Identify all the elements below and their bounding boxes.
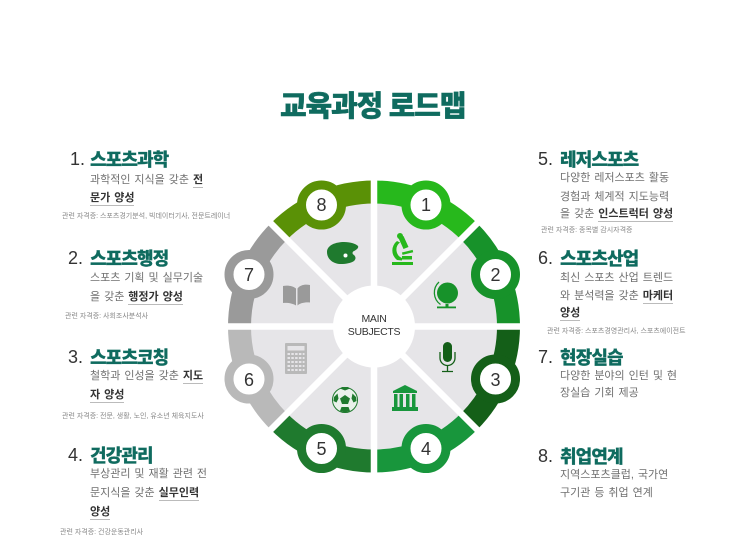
item 1: 스포츠과학: 스포츠과학	[90, 150, 168, 170]
center circle	[333, 286, 415, 368]
item 6: 스포츠산업	[538, 248, 686, 335]
icon: globe	[434, 282, 458, 308]
center label	[348, 313, 401, 338]
item 7: 현장실습: 현장실습	[560, 348, 623, 368]
badge numbers: 7	[244, 265, 254, 285]
icon: palette	[327, 242, 358, 264]
icon: microphone	[440, 342, 455, 372]
icon: calculator	[285, 343, 307, 374]
item 3: 스포츠코칭	[62, 347, 204, 420]
item 4: 건강관리: 건강관리	[90, 446, 153, 466]
item 5: 레저스포츠: 을 갖춘 인스트럭터 양성	[560, 208, 673, 220]
icon: temple	[392, 385, 418, 411]
item 1: 스포츠과학	[62, 149, 230, 220]
badge numbers: 6	[244, 370, 254, 390]
item 7: 현장실습: 다양한 분야의 인턴 및 현	[560, 370, 677, 382]
item 3: 스포츠코칭: 관련 자격증: 전문, 생활, 노인, 유소년 체육지도사	[62, 413, 204, 420]
item 6: 스포츠산업: 양성	[560, 307, 580, 319]
item 8: 취업연계	[538, 446, 668, 499]
center label: SUBJECTS	[348, 326, 401, 338]
segment 3	[469, 326, 516, 422]
badge numbers: 8	[316, 195, 327, 215]
center label: MAIN	[361, 313, 387, 325]
item 4: 건강관리: 문지식을 갖춘 실무인력	[90, 487, 199, 499]
item 6: 스포츠산업: 관련 자격증: 스포츠경영관리사, 스포츠에이전트	[547, 328, 686, 335]
item 4: 건강관리: 양성	[90, 506, 110, 518]
item 1: 스포츠과학: 문가 양성	[90, 192, 134, 204]
icon: book	[283, 285, 310, 306]
item 4: 건강관리: 4.	[68, 445, 83, 465]
item 5: 레저스포츠: 다양한 레저스포츠 활동	[560, 172, 669, 184]
item 6: 스포츠산업: 6.	[538, 248, 553, 268]
item 3: 스포츠코칭: 스포츠코칭	[90, 348, 168, 368]
segment 8	[279, 185, 374, 231]
wheel inner disc	[249, 202, 499, 452]
item 2: 스포츠행정: 을 갖춘 행정가 양성	[90, 291, 183, 303]
badge numbers: 3	[490, 370, 501, 390]
item 6: 스포츠산업: 최신 스포츠 산업 트렌드	[560, 272, 673, 284]
item 2: 스포츠행정: 2.	[68, 248, 83, 268]
item 8: 취업연계: 8.	[538, 446, 553, 466]
badge numbers: 5	[316, 439, 327, 459]
item 5: 레저스포츠: 경험과 체계적 지도능력	[560, 191, 669, 203]
separators	[218, 170, 530, 483]
segment 5	[279, 422, 374, 468]
segment 1	[374, 185, 469, 231]
item 6: 스포츠산업: 와 분석력을 갖춘 마케터	[560, 290, 673, 302]
item 5: 레저스포츠: 관련 자격증: 종목별 감시자격증	[541, 227, 632, 234]
item 4: 건강관리	[60, 445, 207, 536]
item 7: 현장실습: 7.	[538, 347, 553, 367]
item 2: 스포츠행정	[65, 248, 203, 320]
item 3: 스포츠코칭: 자 양성	[90, 389, 124, 401]
icon: soccer ball	[332, 387, 358, 412]
item 5: 레저스포츠	[538, 149, 673, 234]
segment 2	[469, 231, 516, 326]
item 6: 스포츠산업: 스포츠산업	[560, 249, 638, 269]
badge numbers	[244, 195, 501, 459]
item 4: 건강관리: 부상관리 및 재활 관련 전	[90, 468, 207, 480]
item 1: 스포츠과학: 관련 자격증: 스포츠경기분석, 빅데이터기사, 전문트레이너	[62, 213, 230, 220]
item 5: 레저스포츠: 5.	[538, 149, 553, 169]
badge numbers: 1	[421, 195, 431, 215]
item 2: 스포츠행정: 관련 자격증: 사회조사분석사	[65, 313, 148, 320]
segment 7	[229, 231, 279, 326]
segment 6	[229, 326, 279, 422]
badge numbers: 2	[490, 265, 501, 285]
item 8: 취업연계: 지역스포츠클럽, 국가연	[560, 469, 668, 481]
icon: microscope	[392, 233, 413, 265]
item 1: 스포츠과학: 1.	[70, 149, 85, 169]
item 8: 취업연계: 구기관 등 취업 연계	[560, 487, 653, 499]
item 2: 스포츠행정: 스포츠행정	[90, 249, 168, 269]
item 7: 현장실습: 장실습 기회 제공	[560, 387, 639, 399]
item 1: 스포츠과학: 과학적인 지식을 갖춘 전	[90, 174, 203, 186]
item 5: 레저스포츠: 레저스포츠	[560, 150, 638, 170]
segment 4	[374, 422, 469, 468]
item 3: 스포츠코칭: 철학과 인성을 갖춘 지도	[90, 370, 203, 382]
item 4: 건강관리: 관련 자격증: 건강운동관리사	[60, 529, 143, 536]
badge numbers: 4	[421, 439, 431, 459]
item 7: 현장실습	[538, 347, 677, 399]
item 8: 취업연계: 취업연계	[560, 447, 623, 467]
title: 교육과정 로드맵	[280, 91, 465, 123]
item 2: 스포츠행정: 스포츠 기획 및 실무기술	[90, 272, 203, 284]
item 3: 스포츠코칭: 3.	[68, 347, 83, 367]
